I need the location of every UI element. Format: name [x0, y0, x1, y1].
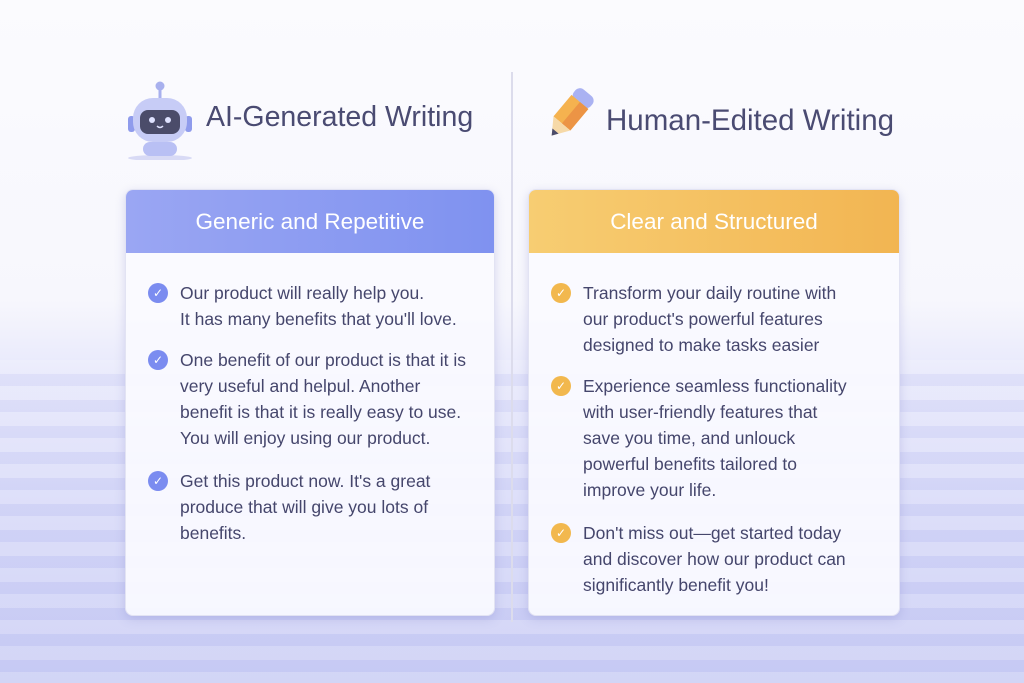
item 1: our product's powerful features: [583, 309, 823, 329]
header: Generic and Repetitive: Generic and Repetitive: [196, 209, 424, 234]
item 2: powerful benefits tailored to: [583, 454, 797, 474]
item 1: Our product will really help you.: [180, 283, 424, 303]
item 3: significantly benefit you!: [583, 575, 769, 595]
header: Clear and Structured: [529, 190, 899, 253]
panel: Human card: [528, 189, 900, 616]
item 3: and discover how our product can: [583, 549, 846, 569]
header: Clear and Structured: Clear and Structured: [610, 209, 818, 234]
panel: AI card: ✓: [153, 353, 163, 367]
item 3: Don't miss out—get started today: [583, 523, 841, 543]
item 1: [148, 283, 457, 329]
panel: Human card: ✓: [556, 526, 566, 540]
item 1: It has many benefits that you'll love.: [180, 309, 457, 329]
item 3: benefits.: [180, 523, 246, 543]
item 2: One benefit of our product is that it is: [180, 350, 466, 370]
item 3: [551, 523, 846, 595]
icon: robot: [128, 82, 192, 160]
title: AI-Generated Writing: AI-Generated Writing: [206, 101, 473, 133]
item 2: improve your life.: [583, 480, 716, 500]
item 3: [148, 471, 430, 543]
title: Human-Edited Writing: Human-Edited Writing: [606, 104, 894, 137]
item 3: Get this product now. It's a great: [180, 471, 430, 491]
panel: AI card: ✓: [153, 286, 163, 300]
item 3: produce that will give you lots of: [180, 497, 428, 517]
item 2: [551, 376, 847, 500]
item 2: with user-friendly features that: [583, 402, 817, 422]
item 1: Transform your daily routine with: [583, 283, 836, 303]
item 1: designed to make tasks easier: [583, 335, 819, 355]
panel: AI card: [125, 189, 495, 616]
item 2: Experience seamless functionality: [583, 376, 847, 396]
panel: Human card: ✓: [556, 379, 566, 393]
item 1: [551, 283, 836, 355]
panel: Human card: ✓: [556, 286, 566, 300]
item 2: very useful and helpul. Another: [180, 376, 420, 396]
item 2: save you time, and unlouck: [583, 428, 795, 448]
panel: AI card: ✓: [153, 474, 163, 488]
icon: pencil: [552, 88, 594, 136]
item 2: You will enjoy using our product.: [180, 428, 430, 448]
header: Generic and Repetitive: [126, 190, 494, 253]
item 2: [148, 350, 466, 448]
item 2: benefit is that it is really easy to use.: [180, 402, 461, 422]
